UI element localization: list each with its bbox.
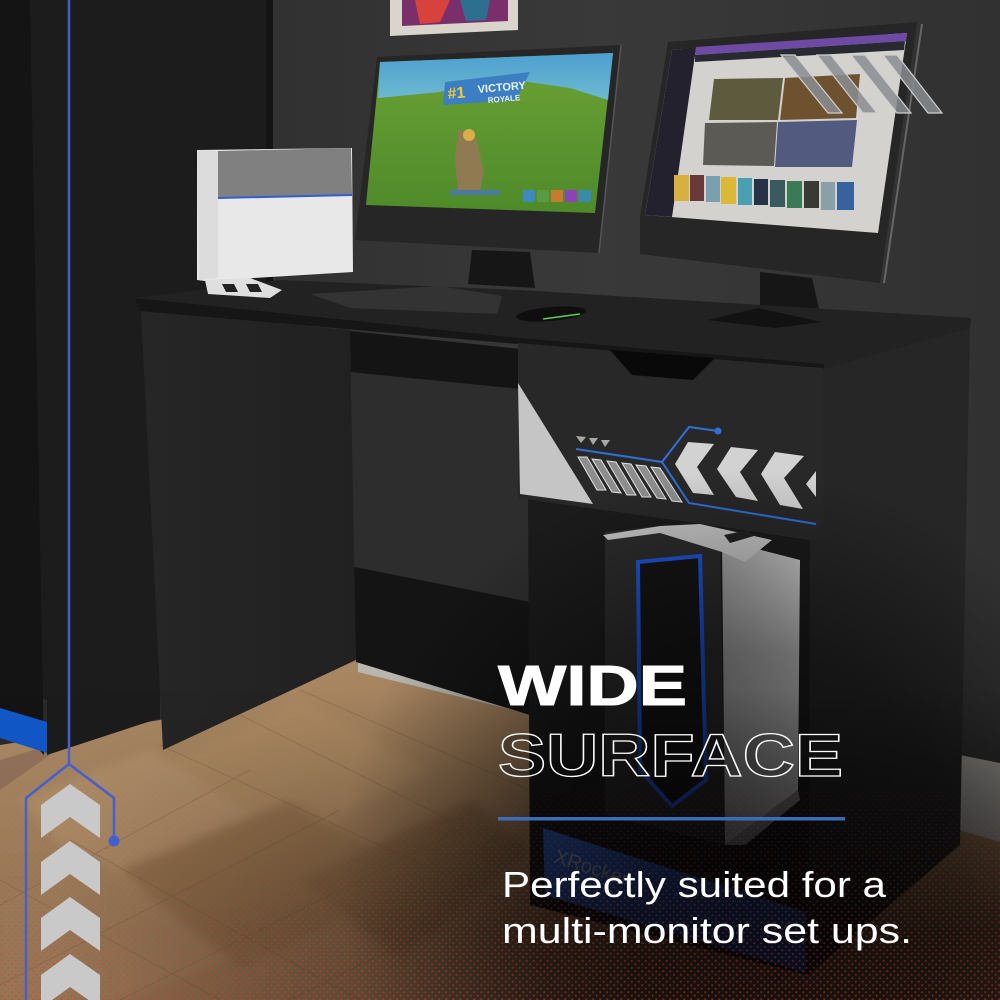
game screen xyxy=(366,53,613,213)
framed picture xyxy=(390,0,518,36)
baseboard xyxy=(358,655,1000,842)
right monitor xyxy=(640,22,922,322)
mouse xyxy=(516,304,586,324)
title: WIDE: WIDE xyxy=(498,654,687,718)
drawer front xyxy=(518,343,823,541)
left chevrons column xyxy=(41,784,100,1000)
drawer slanted bars xyxy=(578,457,682,502)
drawer triangles xyxy=(576,436,610,447)
blue box under tower: XRocker xyxy=(551,846,632,891)
drawer blue circuit line xyxy=(576,427,816,524)
dark gradient overlay xyxy=(0,460,1000,1000)
game screen: VICTORY xyxy=(477,80,527,96)
game console xyxy=(197,148,353,281)
blue box under tower xyxy=(543,828,806,973)
drawer handle cut-out xyxy=(610,350,715,380)
body text: Perfectly suited for a xyxy=(502,864,887,905)
web screen xyxy=(645,33,907,233)
red halftone dots xyxy=(0,790,1000,1000)
left monitor xyxy=(355,45,621,288)
game screen: #1 xyxy=(447,84,466,103)
PC tower xyxy=(603,524,800,845)
body text: multi-monitor set ups. xyxy=(502,910,912,951)
desk top xyxy=(135,280,971,369)
drawer chevrons xyxy=(675,442,816,509)
keyboard xyxy=(310,286,502,314)
wardrobe at left xyxy=(0,0,273,755)
divider rule xyxy=(498,817,845,820)
game screen: ROYALE xyxy=(487,93,521,105)
desk back panel xyxy=(340,330,530,715)
right monitor base xyxy=(708,308,822,328)
back wall xyxy=(0,0,1000,790)
right monitor stand xyxy=(760,272,822,322)
body text xyxy=(502,864,912,951)
monitors slanted graphic xyxy=(781,55,942,113)
cabinet interior xyxy=(528,498,812,975)
left monitor stand xyxy=(468,250,535,288)
desk right side panel xyxy=(808,325,970,975)
desk left leg xyxy=(141,310,356,750)
left circuit line xyxy=(26,0,120,1000)
drawer corner triangle xyxy=(518,383,593,504)
controller dock xyxy=(205,278,282,298)
floor: wood parquet xyxy=(0,655,1000,1000)
title: SURFACE outlined: SURFACE xyxy=(498,722,843,789)
